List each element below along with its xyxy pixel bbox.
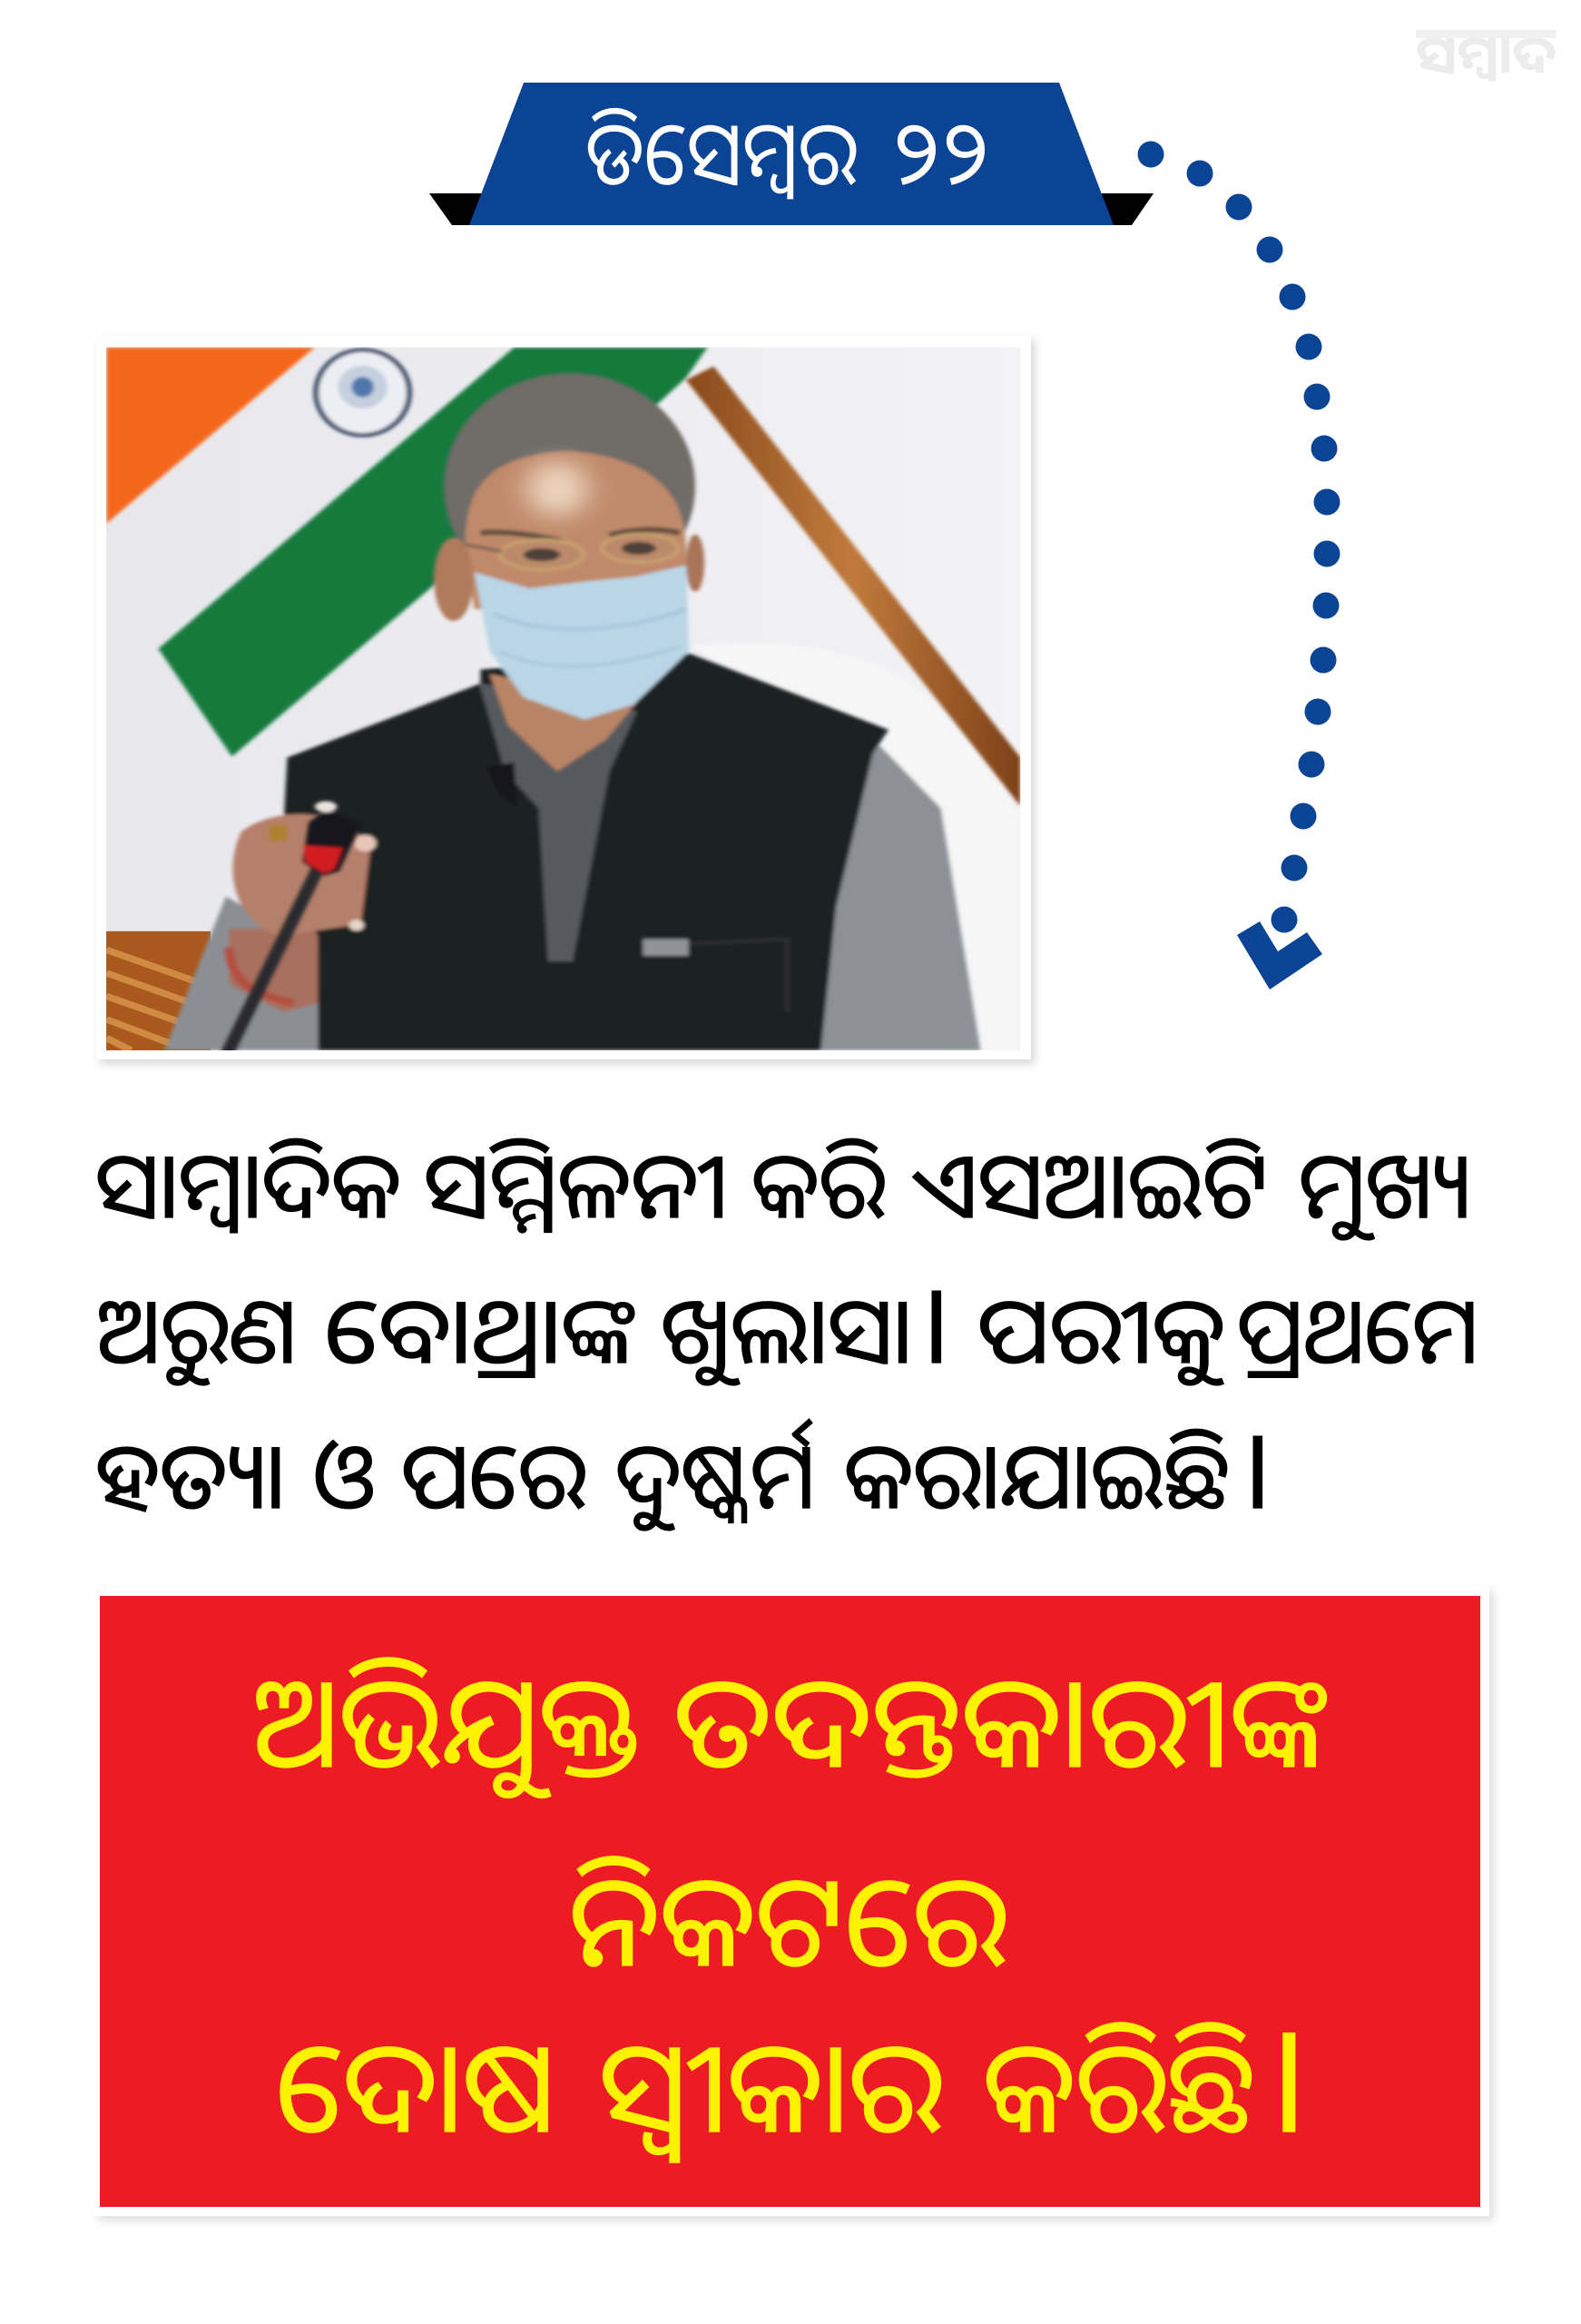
photo panel [96, 335, 1035, 1064]
callout text: ତଦନ୍ତକାରୀଙ୍କ [673, 1631, 1328, 1805]
body text: ସାମ୍ବାଦିକ [95, 1119, 401, 1245]
callout text: କରିଛି [983, 1996, 1255, 2170]
sleeves [821, 739, 980, 1050]
body text: ପ୍ରଥମେ [1237, 1265, 1478, 1390]
body text: ଅରୁଣ [97, 1265, 297, 1390]
photo: official at press conference [106, 347, 1020, 1050]
vest [284, 654, 889, 1050]
callout text: ନିକଟରେ [569, 1830, 1007, 2004]
body text: ସମ୍ମିଳନୀ [424, 1119, 728, 1245]
body text [95, 1119, 1478, 1541]
microphone [226, 801, 361, 1057]
date heading: ଡିସେମ୍ବର [585, 89, 858, 211]
dotted arrow [1138, 142, 1340, 990]
body text: ଏସଆଇଟି [912, 1119, 1269, 1245]
body text: ବୋଥ୍ରାଙ୍କ [325, 1265, 635, 1390]
date heading: ୨୨ [892, 89, 990, 211]
callout text: ଦୋଷ [276, 1996, 555, 2170]
body text: । [1244, 1393, 1272, 1541]
eyebrows [480, 529, 680, 541]
body text: ପରେ [401, 1410, 586, 1535]
flag [106, 347, 1020, 806]
body text: ଖୁଲାସା [661, 1265, 912, 1390]
wood table [106, 931, 211, 1050]
body text: ଦୁଷ୍କର୍ମ [615, 1410, 815, 1535]
logo watermark: ସମ୍ବାଦ [1416, 16, 1556, 88]
callout panel [92, 1586, 1494, 2221]
date ribbon [429, 83, 1154, 225]
shirt [479, 684, 637, 961]
hand [232, 814, 371, 936]
body text: କରାଯାଇଛି [844, 1410, 1230, 1535]
chest pocket [643, 939, 689, 956]
body text: ମୁଖ୍ୟ [1299, 1119, 1471, 1245]
head [444, 373, 695, 600]
body text: । [923, 1247, 950, 1395]
mask [475, 566, 689, 720]
body text: ଓ [313, 1410, 376, 1535]
body text: କରି [751, 1119, 886, 1245]
callout text: ଅଭିଯୁକ୍ତ [253, 1631, 640, 1805]
body text: ହତ୍ୟା [95, 1410, 285, 1535]
callout text: ସ୍ୱୀକାର [599, 1996, 943, 2170]
chair [975, 752, 984, 763]
forearm [229, 929, 318, 1012]
callout text: । [1271, 1973, 1308, 2176]
callout text [253, 1631, 1328, 2176]
body text: ପରୀକୁ [977, 1265, 1225, 1390]
glasses [500, 540, 584, 569]
